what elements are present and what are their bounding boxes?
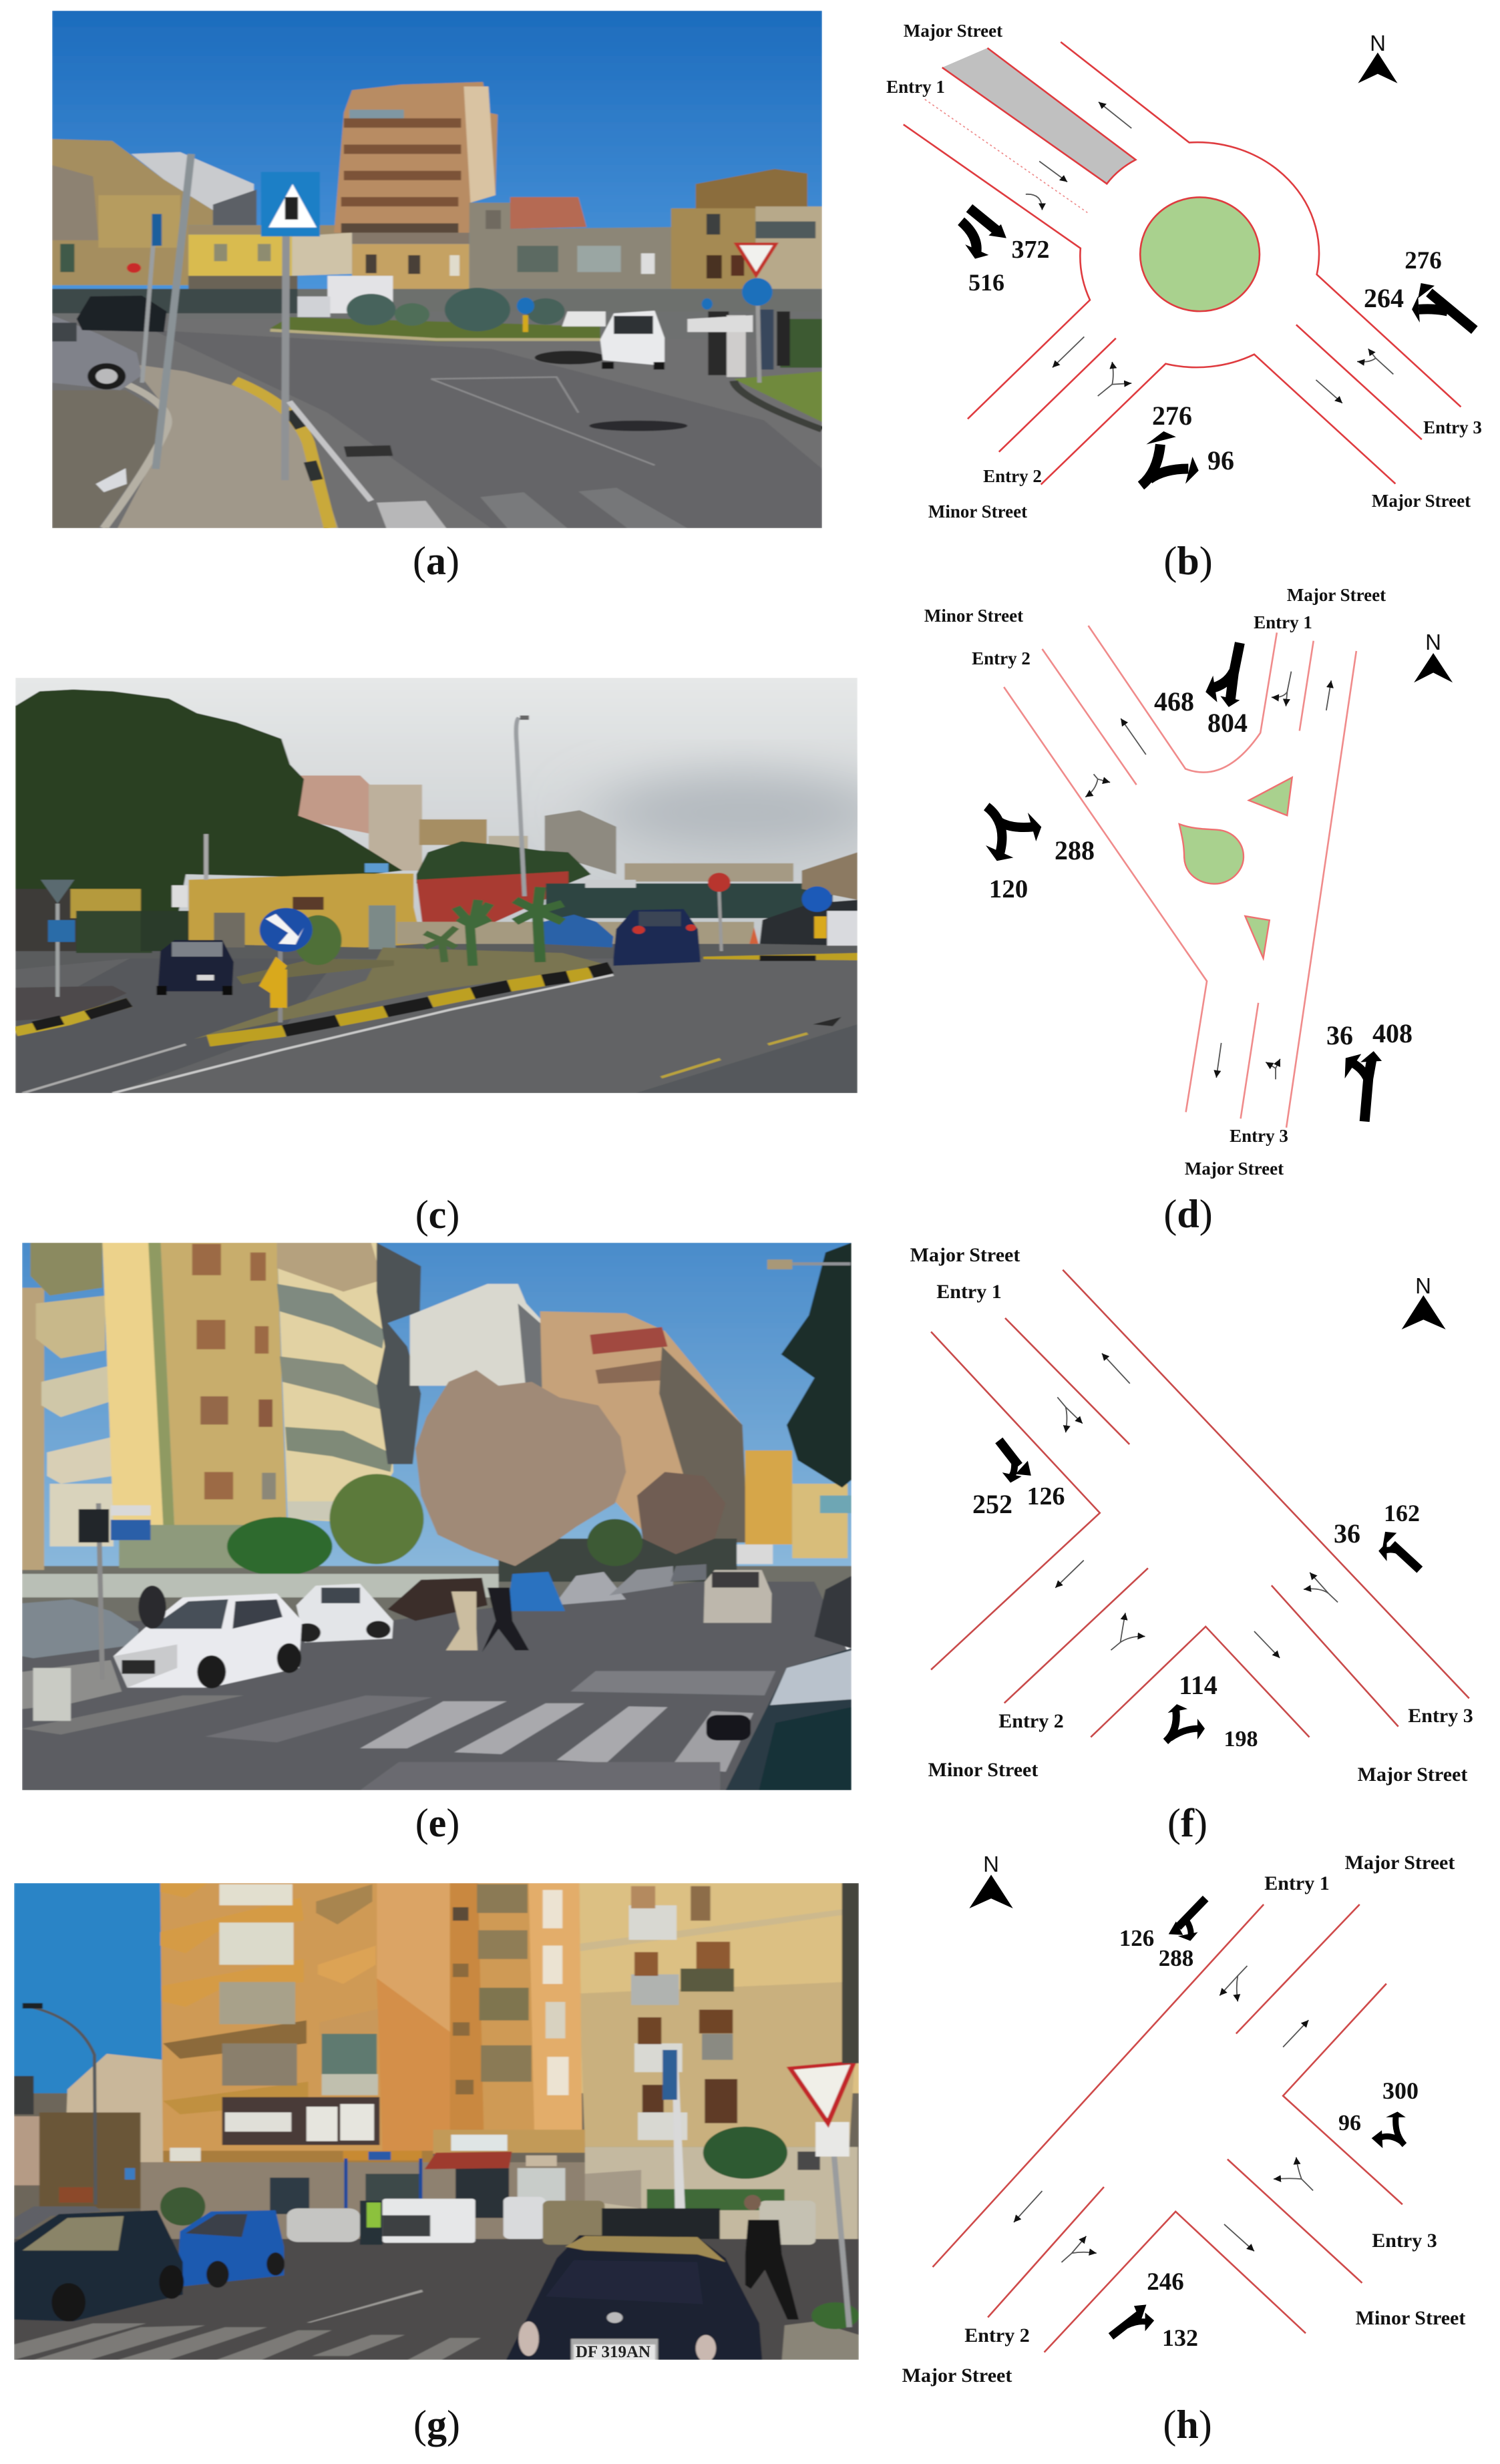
caption (h): (h) [1163, 2403, 1212, 2447]
labels (h): Major Street [902, 2365, 1012, 2387]
labels (d): Entry 2 [972, 648, 1030, 668]
labels (f): Major Street [1358, 1764, 1467, 1786]
labels (h): 246 [1147, 2268, 1184, 2296]
labels (f): Major Street [910, 1244, 1020, 1266]
labels (d): Major Street [1287, 585, 1386, 605]
labels (h): Entry 1 [1264, 1872, 1330, 1894]
caption (g): (g) [413, 2403, 460, 2447]
traffic islands [1179, 777, 1292, 958]
north arrow [969, 1874, 1013, 1908]
splitter island [942, 48, 1135, 184]
labels (f): Entry 2 [998, 1710, 1064, 1732]
road edges [904, 42, 1461, 485]
labels (d): 120 [989, 875, 1028, 903]
labels (d): Minor Street [924, 606, 1023, 626]
labels (f): Entry 1 [936, 1281, 1002, 1303]
labels (f): 252 [972, 1489, 1012, 1519]
labels (f): N [1415, 1273, 1431, 1298]
labels (d): 804 [1207, 708, 1248, 738]
labels (b): 96 [1207, 445, 1234, 475]
caption (c): (c) [415, 1193, 459, 1237]
photo (e): street with pedestrians crossing [22, 1243, 852, 1790]
lane arrows [1085, 672, 1331, 1079]
labels (f): Minor Street [928, 1759, 1038, 1781]
labels (b): 372 [1011, 236, 1050, 264]
labels (h): 300 [1382, 2077, 1419, 2104]
labels (b): Entry 1 [886, 77, 945, 97]
labels (b): Major Street [1372, 491, 1471, 511]
labels (b): Major Street [904, 21, 1002, 41]
labels (h): Minor Street [1356, 2307, 1465, 2329]
labels (h): N [983, 1852, 999, 1876]
lane arrows [1026, 102, 1393, 403]
labels (b): 276 [1404, 247, 1442, 274]
photo (g): street corner with apartment blocks [14, 1883, 859, 2362]
flow arrows [986, 643, 1382, 1121]
labels (d): Major Street [1185, 1159, 1284, 1179]
labels (d) [924, 585, 1441, 1179]
labels (f): Entry 3 [1408, 1705, 1473, 1727]
labels (d): Entry 1 [1254, 612, 1312, 632]
road edges [1004, 626, 1356, 1128]
caption (b): (b) [1163, 539, 1213, 583]
flow arrows [1111, 1898, 1406, 2336]
flow arrows [999, 1440, 1420, 1741]
labels (d): 468 [1154, 686, 1194, 716]
north arrow [1414, 653, 1453, 682]
caption (f): (f) [1167, 1801, 1207, 1845]
labels (f): 114 [1179, 1670, 1217, 1700]
labels (f): 36 [1334, 1518, 1360, 1549]
labels (h): 288 [1159, 1945, 1193, 1971]
photo (a): roundabout street view [52, 11, 822, 528]
labels (d): N [1425, 630, 1441, 654]
caption (d): (d) [1163, 1192, 1213, 1236]
labels (f): 198 [1224, 1727, 1258, 1752]
labels (b): 516 [968, 269, 1004, 296]
caption (e): (e) [415, 1801, 459, 1845]
labels (d): 288 [1055, 835, 1095, 865]
labels (b): Entry 2 [983, 466, 1042, 486]
lane arrows [1055, 1354, 1338, 1658]
labels (d): 408 [1372, 1018, 1413, 1048]
car plate text: DF 319AN [576, 2343, 650, 2361]
labels (b): Minor Street [928, 501, 1027, 522]
panel: T-junction diagram (f) [910, 1244, 1473, 1786]
panel: roundabout diagram (b) [886, 21, 1482, 522]
road edges [933, 1904, 1402, 2352]
north arrow [1402, 1295, 1446, 1329]
labels (h) [902, 1852, 1465, 2387]
labels (b): 264 [1364, 283, 1404, 313]
labels (d): 36 [1326, 1020, 1353, 1050]
labels (d): Entry 3 [1230, 1126, 1288, 1146]
labels (h): 96 [1338, 2111, 1361, 2135]
labels (b) [886, 21, 1482, 522]
flow arrows [961, 208, 1475, 485]
lane arrows [1014, 1966, 1313, 2262]
labels (h): 126 [1119, 1925, 1154, 1951]
caption (a): (a) [413, 539, 459, 583]
central island [1140, 197, 1260, 311]
panel: junction diagram (d) [924, 585, 1453, 1179]
labels (f): 162 [1384, 1500, 1420, 1526]
north arrow [1358, 53, 1398, 83]
labels (b): Entry 3 [1423, 417, 1482, 437]
panel: T-junction diagram (h) [902, 1852, 1465, 2387]
labels (h): Entry 2 [964, 2324, 1030, 2346]
labels (b): 276 [1152, 401, 1192, 431]
labels (f) [910, 1244, 1473, 1786]
labels (h): Entry 3 [1372, 2230, 1437, 2252]
labels (b): N [1370, 31, 1386, 55]
labels (h): 132 [1162, 2324, 1198, 2351]
labels (h): Major Street [1345, 1852, 1455, 1874]
road edges [931, 1270, 1469, 1737]
photo (c): channelized junction on a wet day [15, 678, 889, 1093]
labels (f): 126 [1027, 1482, 1065, 1510]
